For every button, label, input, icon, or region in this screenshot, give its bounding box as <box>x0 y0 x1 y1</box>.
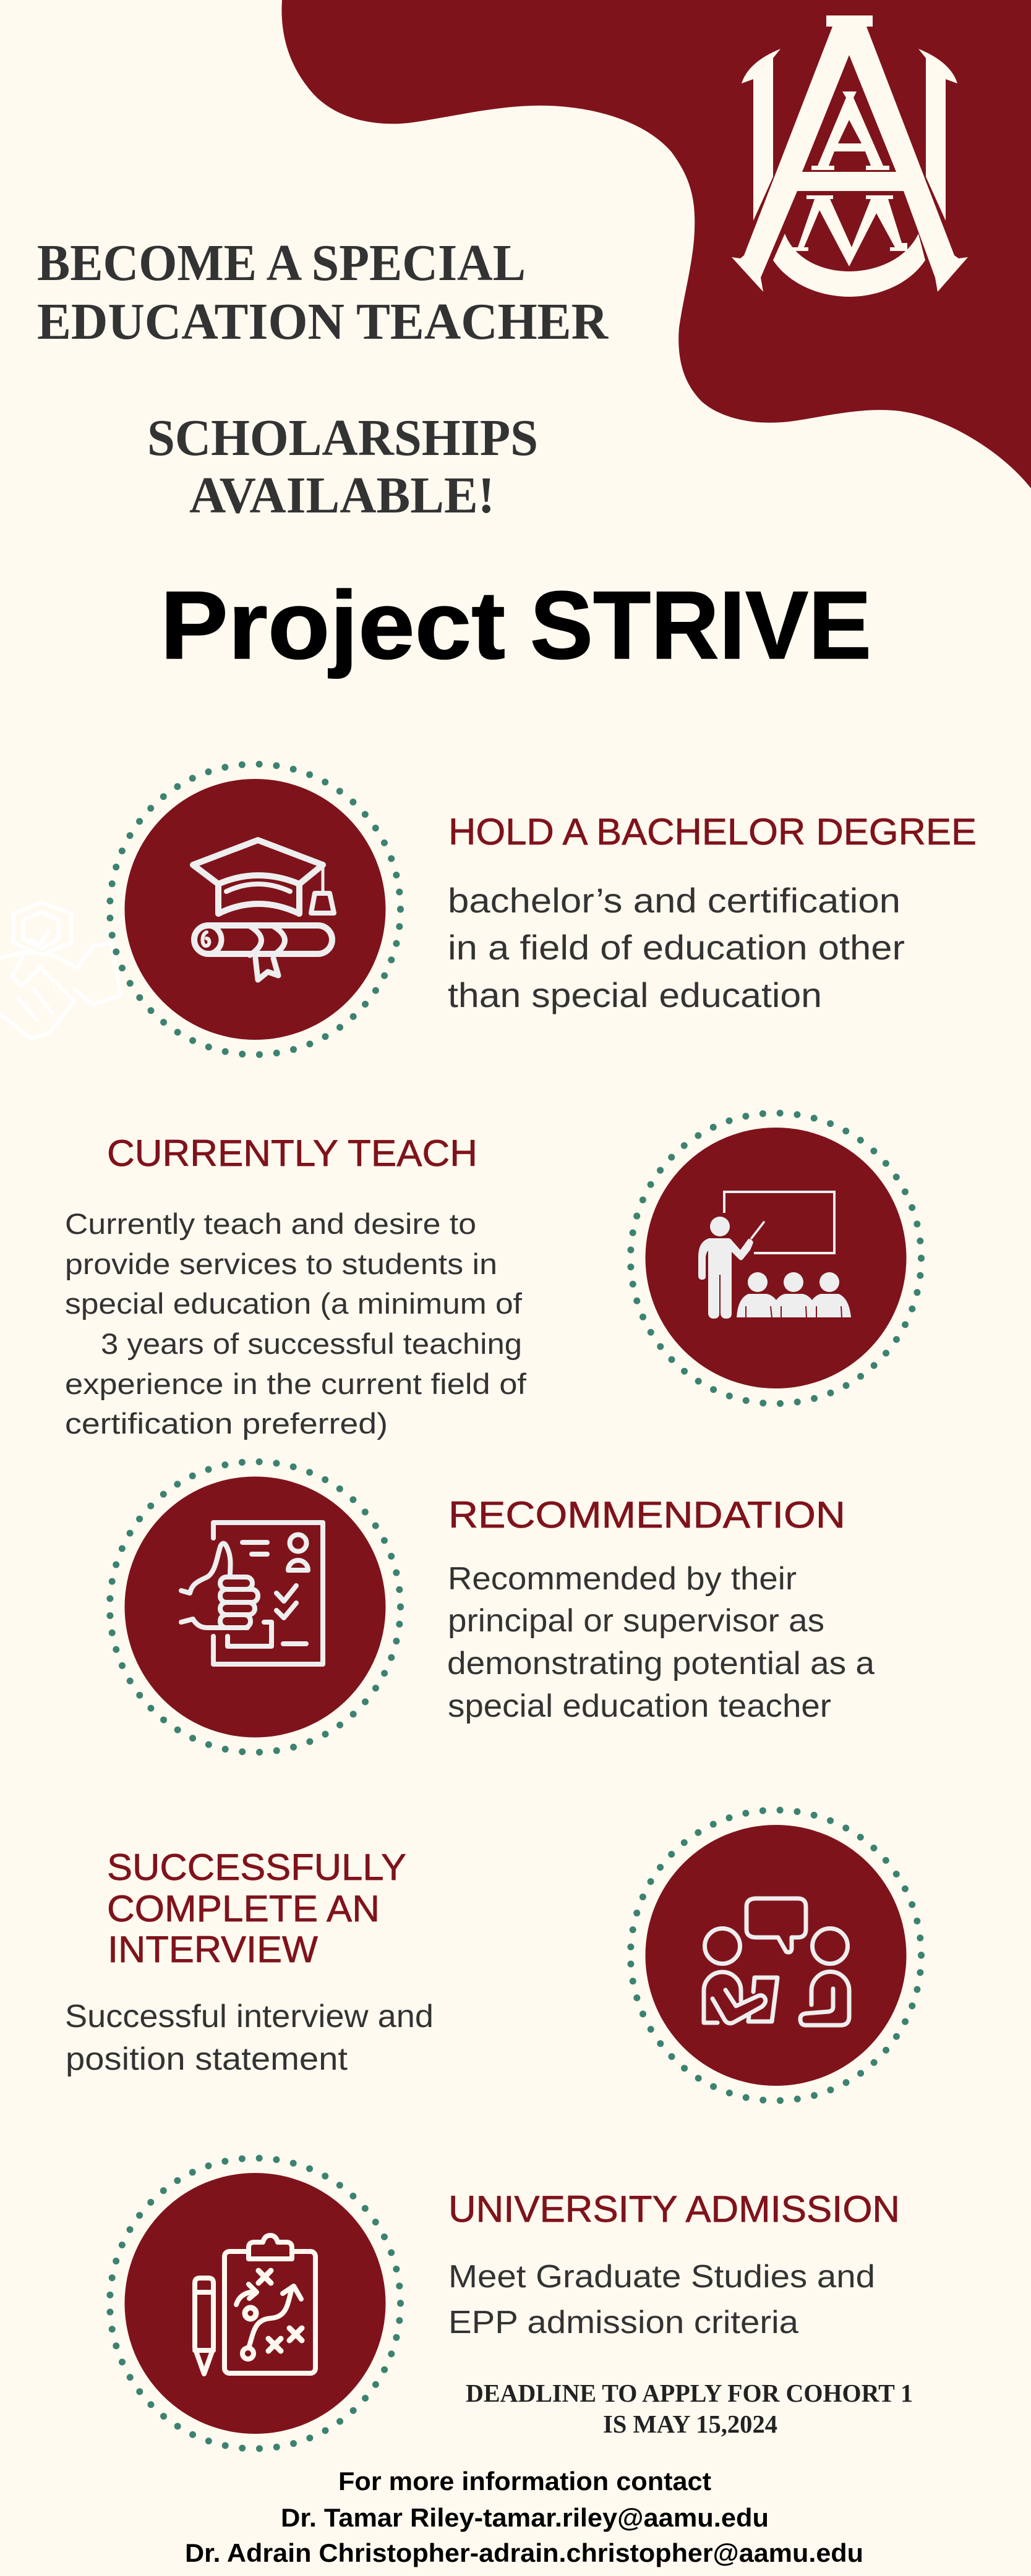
icon: graduation cap and diploma badge <box>110 764 401 1055</box>
body text: teaching experience: 3 years of successful teaching <box>101 1327 522 1360</box>
icon: clipboard game plan and pencil badge <box>110 2158 401 2449</box>
heading: hold a bachelor degree: HOLD A BACHELOR DEGREE <box>448 811 977 852</box>
body text: bachelor requirement: than special education <box>448 976 822 1014</box>
body text: recommendation <box>447 1561 875 1724</box>
body text: interview: Successful interview and <box>65 1999 434 2034</box>
contact information: Dr. Tamar Riley-tamar.riley@aamu.edu <box>281 2503 769 2532</box>
body text: teaching experience: Currently teach and desire to <box>65 1207 476 1240</box>
subtitle: scholarships available <box>147 409 538 524</box>
body text: interview: position statement <box>66 2041 348 2077</box>
heading: successfully complete an interview: COMPLETE AN <box>107 1888 380 1929</box>
icon: thumbs up on document badge <box>110 1461 401 1752</box>
body text: interview <box>65 1999 434 2077</box>
body text: teaching experience: certification preferred) <box>65 1407 388 1440</box>
contact information: For more information contact <box>338 2467 711 2496</box>
heading: recommendation: RECOMMENDATION <box>448 1494 845 1536</box>
contact information <box>185 2467 863 2567</box>
subtitle: scholarships available: AVAILABLE! <box>189 467 495 524</box>
panel: hold a bachelor degree <box>110 764 977 1055</box>
body text: bachelor requirement: bachelor’s and certification <box>448 881 901 920</box>
icon: two people conversing badge <box>631 1810 922 2101</box>
deadline notice <box>466 2379 913 2438</box>
panel: university admission <box>110 2158 900 2449</box>
panel: recommendation <box>110 1461 875 1752</box>
title: become a special education teacher: BECOME A SPECIAL <box>37 234 526 292</box>
body text: teaching experience: experience in the current field of <box>65 1367 527 1400</box>
body text: recommendation: demonstrating potential as a <box>447 1646 875 1681</box>
body text: admission criteria <box>448 2259 875 2340</box>
title: become a special education teacher <box>37 234 609 351</box>
program name: Project STRIVE <box>160 572 871 679</box>
heading: successfully complete an interview <box>107 1847 406 1970</box>
body text: recommendation: principal or supervisor as <box>448 1603 824 1639</box>
deadline notice: IS MAY 15,2024 <box>603 2410 777 2438</box>
program name: Project STRIVE: STRIVE <box>530 572 871 679</box>
body text: admission criteria: Meet Graduate Studies and <box>448 2259 875 2295</box>
heading: university admission: UNIVERSITY ADMISSION <box>448 2188 900 2230</box>
icon: teacher with students badge <box>631 1113 922 1403</box>
heading: currently teach: CURRENTLY TEACH <box>107 1133 477 1174</box>
body text: recommendation: Recommended by their <box>448 1561 797 1597</box>
body text: teaching experience <box>65 1207 527 1440</box>
program name: Project STRIVE: Project <box>160 572 505 679</box>
panel: currently teach <box>65 1113 922 1440</box>
heading: successfully complete an interview: SUCCESSFULLY <box>107 1847 406 1888</box>
heading: successfully complete an interview: INTERVIEW <box>108 1929 318 1970</box>
deadline notice: DEADLINE TO APPLY FOR COHORT 1 <box>466 2379 913 2407</box>
body text: teaching experience: provide services to students in <box>65 1248 497 1280</box>
faint handshake and shield watermark <box>0 903 121 1039</box>
panel: successfully complete an interview <box>65 1810 922 2101</box>
body text: recommendation: special education teacher <box>448 1688 831 1724</box>
contact information: Dr. Adrain Christopher-adrain.christopher@aamu.edu <box>185 2538 863 2567</box>
body text: teaching experience: special education (a minimum of <box>65 1287 523 1320</box>
logo: AAMU monogram <box>732 15 968 297</box>
subtitle: scholarships available: SCHOLARSHIPS <box>147 409 538 467</box>
decorative maroon corner blob <box>281 0 1031 488</box>
title: become a special education teacher: EDUCATION TEACHER <box>37 293 609 351</box>
body text: bachelor requirement <box>448 881 905 1014</box>
body text: bachelor requirement: in a field of education other <box>448 928 905 967</box>
body text: admission criteria: EPP admission criteria <box>448 2305 798 2340</box>
